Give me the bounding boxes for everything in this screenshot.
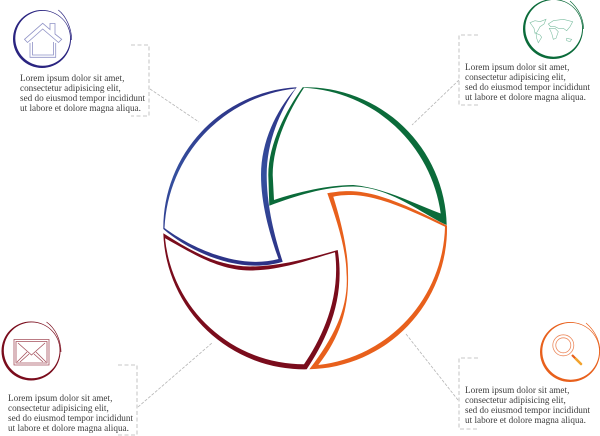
text block: bottom-right: consectetur adipisicing elit, — [465, 395, 566, 405]
text block: top-right — [465, 62, 590, 102]
text block: bottom-left: ut labore et dolore magna aliqua. — [8, 423, 129, 433]
text block: bottom-left: sed do eiusmod tempor incididunt — [8, 413, 133, 423]
segment: orange swirl — [309, 191, 447, 369]
text block: bottom-right: Lorem ipsum dolor sit amet, — [465, 385, 569, 395]
connector: bottom-right bracket and leader — [406, 334, 478, 429]
text block: bottom-right — [465, 385, 590, 425]
icon: envelope — [2, 322, 61, 380]
text block: bottom-left: consectetur adipisicing elit, — [8, 403, 109, 413]
text block: bottom-left: Lorem ipsum dolor sit amet, — [8, 393, 112, 403]
icon: home — [13, 10, 72, 68]
text block: bottom-left — [8, 393, 133, 433]
text block: bottom-right: ut labore et dolore magna aliqua. — [465, 415, 586, 425]
text block: top-right: Lorem ipsum dolor sit amet, — [465, 62, 569, 72]
segment: green swirl — [268, 87, 447, 225]
text block: top-left — [20, 73, 145, 113]
connector: bottom-left bracket and leader — [118, 343, 212, 435]
text block: top-right: ut labore et dolore magna aliqua. — [465, 92, 586, 102]
text block: top-left: ut labore et dolore magna aliqua. — [20, 103, 141, 113]
icon: world map — [523, 0, 584, 59]
icon: magnifier — [540, 322, 600, 382]
connector: top-left bracket and leader — [131, 45, 199, 122]
segment: blue swirl — [163, 87, 297, 266]
text block: top-left: sed do eiusmod tempor incididunt — [20, 93, 145, 103]
text block: top-left: consectetur adipisicing elit, — [20, 83, 121, 93]
text block: top-right: sed do eiusmod tempor incididunt — [465, 82, 590, 92]
text block: top-right: consectetur adipisicing elit, — [465, 72, 566, 82]
connector: top-right bracket and leader — [412, 35, 478, 125]
text block: bottom-right: sed do eiusmod tempor incididunt — [465, 405, 590, 415]
segment: maroon swirl — [163, 233, 340, 369]
text block: top-left: Lorem ipsum dolor sit amet, — [20, 73, 124, 83]
